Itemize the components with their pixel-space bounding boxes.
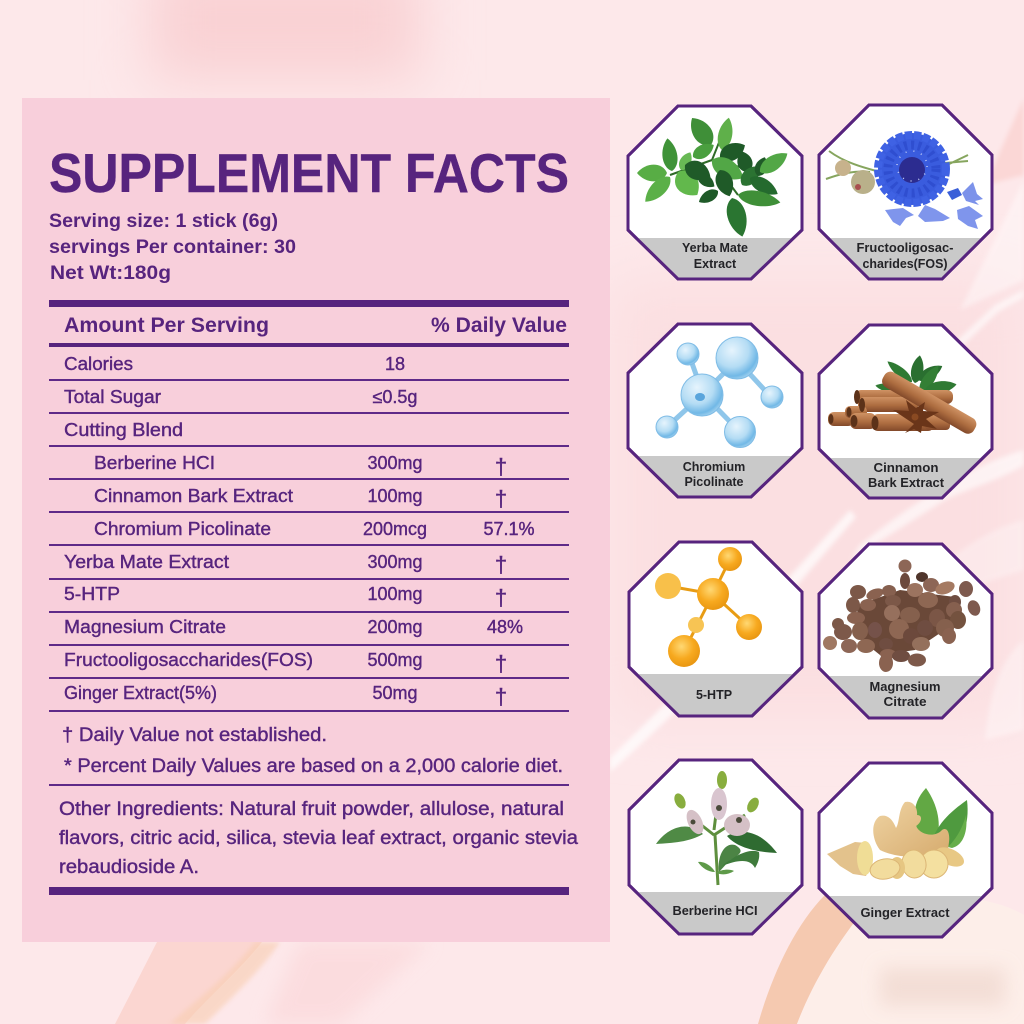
label xyxy=(856,241,954,271)
footnotes: † Daily Value not established. xyxy=(62,725,327,746)
label xyxy=(683,460,745,489)
row: yerba mate xyxy=(64,552,507,577)
label: Chromium xyxy=(683,460,745,474)
row: chromium: 57.1% xyxy=(483,519,535,539)
row: yerba mate: Yerba Mate Extract xyxy=(64,552,229,572)
ingredient: ginger xyxy=(819,763,992,937)
panel: supplement facts xyxy=(22,98,610,942)
row: FOS: Fructooligosaccharides(FOS) xyxy=(64,650,313,670)
other ingredients: Other Ingredients: Natural fruit powder, allulose, natural xyxy=(59,799,564,820)
row: ginger xyxy=(64,683,507,709)
row: ginger: Ginger Extract(5%) xyxy=(64,683,217,703)
icon: blue molecule xyxy=(656,337,783,448)
label: Fructooligosac- xyxy=(856,241,954,255)
row: chromium: 200mcg xyxy=(363,519,427,539)
ingredient: berberine xyxy=(629,760,802,934)
row: 5-HTP: 5-HTP xyxy=(64,584,120,604)
row: cinnamon: 100mg xyxy=(367,486,423,506)
table header xyxy=(64,313,567,337)
label: Citrate xyxy=(884,695,927,709)
row: yerba mate: 300mg xyxy=(367,552,423,572)
row: total sugar: ≤0.5g xyxy=(373,387,417,407)
footnotes xyxy=(62,725,563,777)
other ingredients: flavors, citric acid, silica, stevia leaf extract, organic stevia xyxy=(59,828,578,849)
ingredient: 5-HTP xyxy=(629,542,802,716)
row: 5-HTP xyxy=(64,584,507,610)
row: calories: Calories xyxy=(64,354,133,374)
row: total sugar: Total Sugar xyxy=(64,387,161,407)
row: yerba mate: † xyxy=(495,552,507,577)
row: berberine: † xyxy=(495,454,507,479)
label: Ginger Extract xyxy=(860,906,950,920)
serving information: Serving size: 1 stick (6g) xyxy=(49,211,278,232)
label: Yerba Mate xyxy=(682,241,748,255)
row: berberine: Berberine HCI xyxy=(94,453,215,473)
row: FOS: 500mg xyxy=(367,650,423,670)
row: ginger: 50mg xyxy=(372,683,418,703)
row: 5-HTP: 100mg xyxy=(367,584,423,604)
ingredient: chromium picolinate xyxy=(628,324,802,497)
row: magnesium: Magnesium Citrate xyxy=(64,617,226,637)
other ingredients xyxy=(59,799,578,878)
icon: green leaves xyxy=(637,113,792,239)
label: Berberine HCI xyxy=(672,904,758,918)
row: magnesium: 200mg xyxy=(367,617,423,637)
row: cutting blend: Cutting Blend xyxy=(64,420,183,440)
nutrition table xyxy=(49,300,569,712)
row: chromium: Chromium Picolinate xyxy=(94,519,271,539)
label: 5-HTP xyxy=(696,688,732,702)
icon: flowering herb xyxy=(656,771,777,885)
row: berberine xyxy=(94,453,507,479)
label: Picolinate xyxy=(684,475,744,489)
row: total sugar xyxy=(64,387,417,407)
serving information: servings Per container: 30 xyxy=(49,237,296,258)
row: FOS: † xyxy=(495,651,507,676)
ingredient: yerba mate xyxy=(628,106,802,279)
icon: cinnamon sticks and star anise xyxy=(828,354,979,436)
ingredient: fructooligosaccharides xyxy=(819,105,992,279)
row: FOS xyxy=(64,650,507,676)
other ingredients: rebaudioside A. xyxy=(59,857,199,878)
ingredient: magnesium citrate xyxy=(819,544,992,718)
serving information: Net Wt:180g xyxy=(50,263,171,284)
row: calories xyxy=(64,354,405,374)
icon: ginger root and leaves xyxy=(827,788,968,881)
label: Bark Extract xyxy=(868,476,945,490)
row: calories: 18 xyxy=(385,354,405,374)
table header: % Daily Value xyxy=(431,313,567,337)
label xyxy=(870,680,940,709)
row: cinnamon: Cinnamon Bark Extract xyxy=(94,486,293,506)
row: ginger: † xyxy=(495,684,507,709)
row: chromium xyxy=(94,519,535,539)
label xyxy=(868,461,945,490)
row: 5-HTP: † xyxy=(495,585,507,610)
row: cinnamon xyxy=(94,486,507,511)
label xyxy=(682,241,748,271)
table header: Amount Per Serving xyxy=(64,313,269,337)
ingredient: cinnamon xyxy=(819,325,992,498)
row: magnesium xyxy=(64,617,523,637)
title: SUPPLEMENT FACTS xyxy=(49,142,569,204)
footnotes: * Percent Daily Values are based on a 2,000 calorie diet. xyxy=(64,756,563,777)
row: cinnamon: † xyxy=(495,486,507,511)
label: Extract xyxy=(694,257,737,271)
serving information xyxy=(49,211,296,284)
icon: gold molecule xyxy=(655,547,762,667)
label: Magnesium xyxy=(870,680,940,694)
icon: blue cornflower xyxy=(826,133,983,229)
row: berberine: 300mg xyxy=(367,453,423,473)
label: charides(FOS) xyxy=(862,257,948,271)
icon: brown beans xyxy=(823,560,982,672)
row: magnesium: 48% xyxy=(487,617,523,637)
label: Cinnamon xyxy=(874,461,938,475)
